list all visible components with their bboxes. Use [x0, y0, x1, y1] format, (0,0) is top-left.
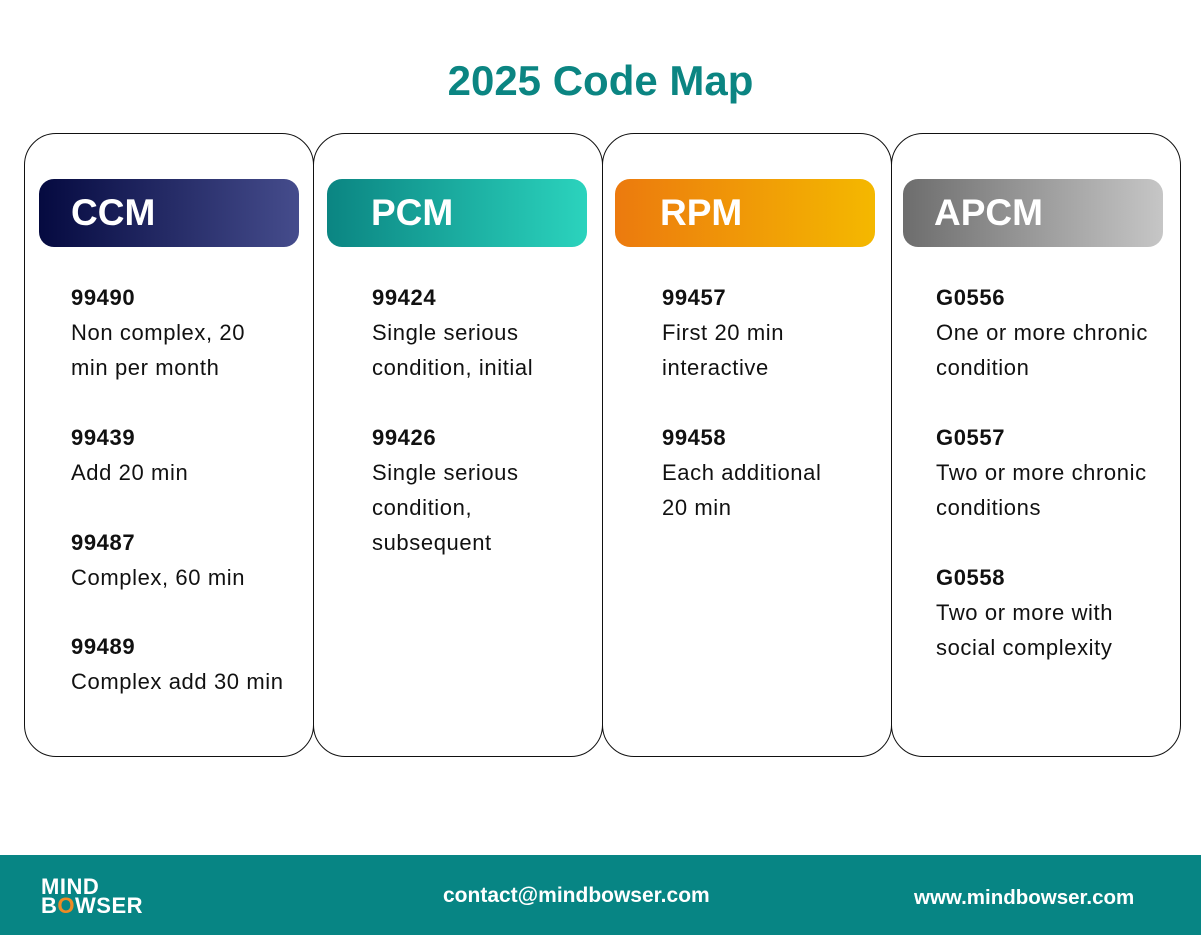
text: PCM codes: condition,: [372, 495, 472, 520]
text: CCM codes: 99490: [71, 285, 135, 310]
logo: MIND: [41, 874, 99, 899]
text: PCM codes: condition, initial Single serious: [372, 355, 533, 485]
title: 2025 Code Map: [448, 57, 753, 104]
text: APCM codes: G0557: [936, 425, 1005, 450]
text: APCM codes: condition Two or more chronic: [936, 355, 1147, 485]
text: APCM codes: G0558: [936, 565, 1005, 590]
panel: PCM: [313, 133, 603, 757]
header: RPM: [615, 179, 875, 247]
text: PCM codes: 99424: [372, 285, 436, 310]
text: CCM codes: Non complex, 20: [71, 320, 245, 345]
header: CCM: [39, 179, 299, 247]
header: CCM: CCM: [71, 192, 155, 233]
header: APCM: APCM: [934, 192, 1043, 233]
text: PCM codes: [372, 285, 533, 555]
text: CCM codes: 99439: [71, 425, 135, 450]
text: APCM codes: G0556: [936, 285, 1005, 310]
website: www.mindbowser.com: [914, 886, 1134, 909]
header: RPM: RPM: [660, 192, 742, 233]
footer: [0, 855, 1201, 935]
text: APCM codes: [936, 285, 1148, 660]
logo: [41, 874, 143, 918]
text: CCM codes: min per month Add 20 min Complex, 60 min Complex add 30 min: [71, 355, 284, 694]
text: RPM codes: 99457: [662, 285, 726, 310]
text: RPM codes: First 20 min: [662, 320, 784, 345]
text: PCM codes: subsequent: [372, 530, 492, 555]
header: PCM: PCM: [371, 192, 453, 233]
text: RPM codes: 20 min: [662, 495, 732, 520]
panel: APCM: [891, 133, 1181, 757]
text: APCM codes: conditions Two or more with: [936, 495, 1113, 625]
panel: RPM: [602, 133, 892, 757]
text: APCM codes: social complexity: [936, 635, 1112, 660]
text: PCM codes: 99426: [372, 425, 436, 450]
text: CCM codes: 99489: [71, 634, 135, 659]
text: CCM codes: 99487: [71, 530, 135, 555]
text: APCM codes: One or more chronic: [936, 320, 1148, 345]
text: RPM codes: interactive Each additional: [662, 355, 821, 485]
text: RPM codes: 99458: [662, 425, 726, 450]
header: APCM: [903, 179, 1163, 247]
text: RPM codes: [662, 285, 821, 520]
contact email: contact@mindbowser.com: [443, 884, 710, 907]
panel: CCM: [24, 133, 314, 757]
text: PCM codes: Single serious: [372, 320, 519, 345]
header: PCM: [327, 179, 587, 247]
logo: BOWSER: [41, 893, 143, 918]
